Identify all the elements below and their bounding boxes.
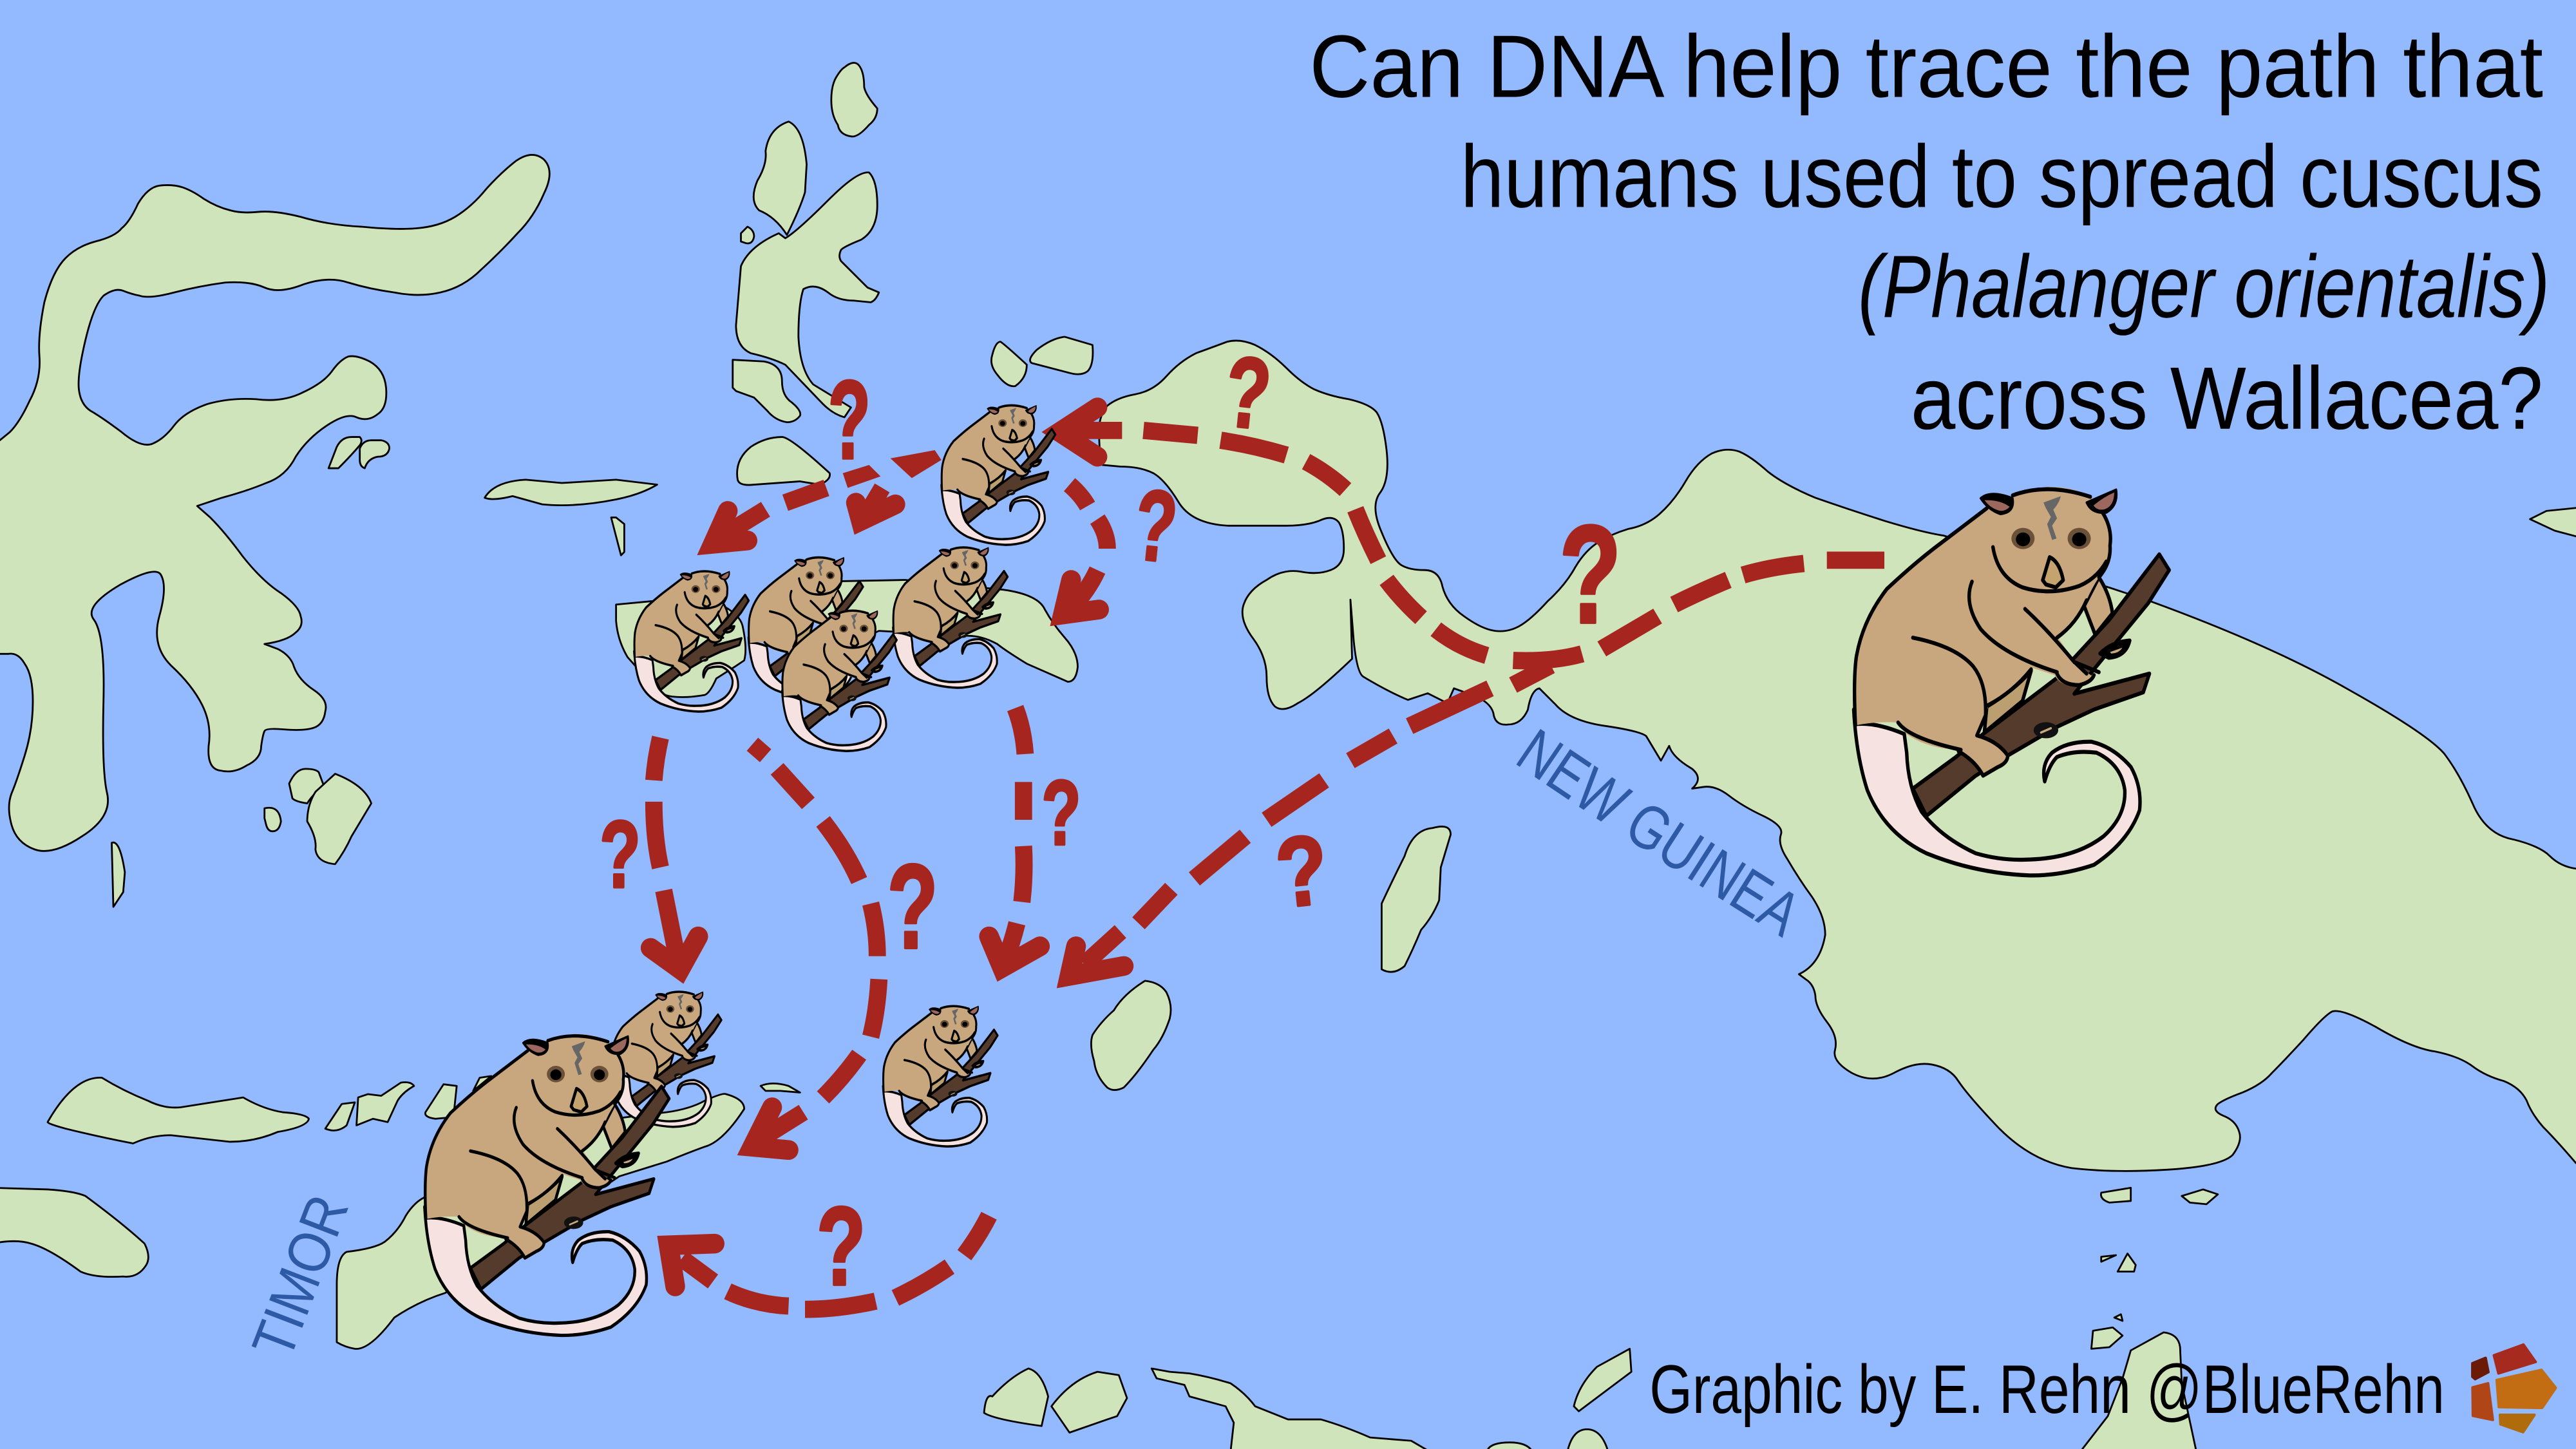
islands: southern coast bumps: [1487, 1429, 1608, 1449]
question mark: Banda Sea route: ?: [1271, 814, 1333, 929]
cuscus: large on Timor: [424, 1034, 669, 1336]
arrow: New Guinea to the Banda Sea: [1070, 665, 1551, 976]
island: Yapen-like long island: [1381, 826, 1451, 972]
cuscus: Seram back: [748, 556, 863, 698]
island: small sliver: [611, 518, 624, 555]
question mark: bottom route: ?: [817, 1184, 866, 1309]
arrow: central Seram to Timor: [752, 744, 879, 1150]
cuscus: large on New Guinea: [1853, 487, 2169, 875]
islands: south-east small pair: [984, 1368, 1127, 1432]
island: Bacan: [733, 360, 800, 422]
question mark: east of top cuscus: ?: [1130, 468, 1182, 583]
island: Halmahera: [736, 173, 879, 417]
island: west Seram: [616, 598, 746, 697]
question mark: east Seram route: ?: [1041, 762, 1081, 864]
island: right edge: [2530, 507, 2576, 537]
island: Tanimbar: [1151, 1368, 1431, 1449]
arrow: top cuscus to east Seram: [1063, 485, 1107, 614]
island: New Guinea: [1099, 341, 2576, 1171]
island: small dot: [741, 227, 754, 243]
island: round island near arrow: [1091, 981, 1171, 1090]
title: Can DNA help trace the path that: [1309, 17, 2543, 117]
cuscus: small on Timor: [611, 991, 721, 1127]
cuscus: east Seram: [893, 547, 1008, 688]
island: Timor: [337, 1094, 744, 1349]
island: small strip: [761, 1083, 800, 1092]
islands: Torres Strait: [2091, 1188, 2218, 1349]
island: Flores: [48, 1077, 309, 1144]
question mark: New Guinea neck: ?: [1559, 497, 1622, 652]
island: Halmahera north: [753, 122, 807, 235]
question mark: west Seram route: ?: [600, 802, 641, 908]
island: Muna: [307, 774, 372, 864]
island: small round: [265, 808, 281, 831]
islands: Banggai: [328, 437, 390, 468]
question mark: Bird's Head: ?: [1220, 335, 1276, 451]
arrow: east Seram to Banda Sea cuscus: [989, 708, 1040, 968]
label: New Guinea: NEW GUINEA: [1516, 729, 1794, 938]
label: Timor: TIMOR: [240, 1186, 361, 1367]
arrow: New Guinea through the Bird's Head to the northern Moluccas: [1059, 408, 1884, 661]
islands: Raja Ampat: [991, 337, 1093, 386]
question mark: Moluccas: ?: [828, 357, 871, 482]
land: Australia tip: [2080, 1332, 2197, 1449]
arrow: top cuscus to central Seram: [856, 488, 895, 521]
island: Morotai: [831, 63, 877, 137]
island: Obi: [737, 437, 830, 485]
arrow: Banda Sea cuscus to Timor: [668, 1216, 989, 1309]
island: east Seram: [822, 580, 1077, 682]
island: thin leaf: [1574, 1349, 1631, 1411]
island: Sulawesi: [0, 155, 549, 851]
logo: [2472, 1345, 2556, 1432]
islands: lesser Sunda group: [325, 1076, 491, 1130]
island: Sumba: [0, 1188, 148, 1277]
island: Buru strip: [485, 480, 657, 506]
island: Buton: [289, 769, 324, 803]
arrow: west Seram to southern Timor cuscus: [650, 737, 698, 969]
question mark: central route: ?: [887, 840, 938, 974]
title: [1309, 17, 2550, 448]
cuscus: Seram front: [782, 610, 896, 751]
cuscus: Banda Sea: [883, 1005, 998, 1146]
island: thin south Sulawesi: [111, 842, 125, 907]
cuscus: west Seram: [634, 571, 749, 712]
cuscus: top, northern Moluccas: [942, 404, 1056, 545]
arrow: top cuscus to west Seram: [713, 450, 942, 544]
